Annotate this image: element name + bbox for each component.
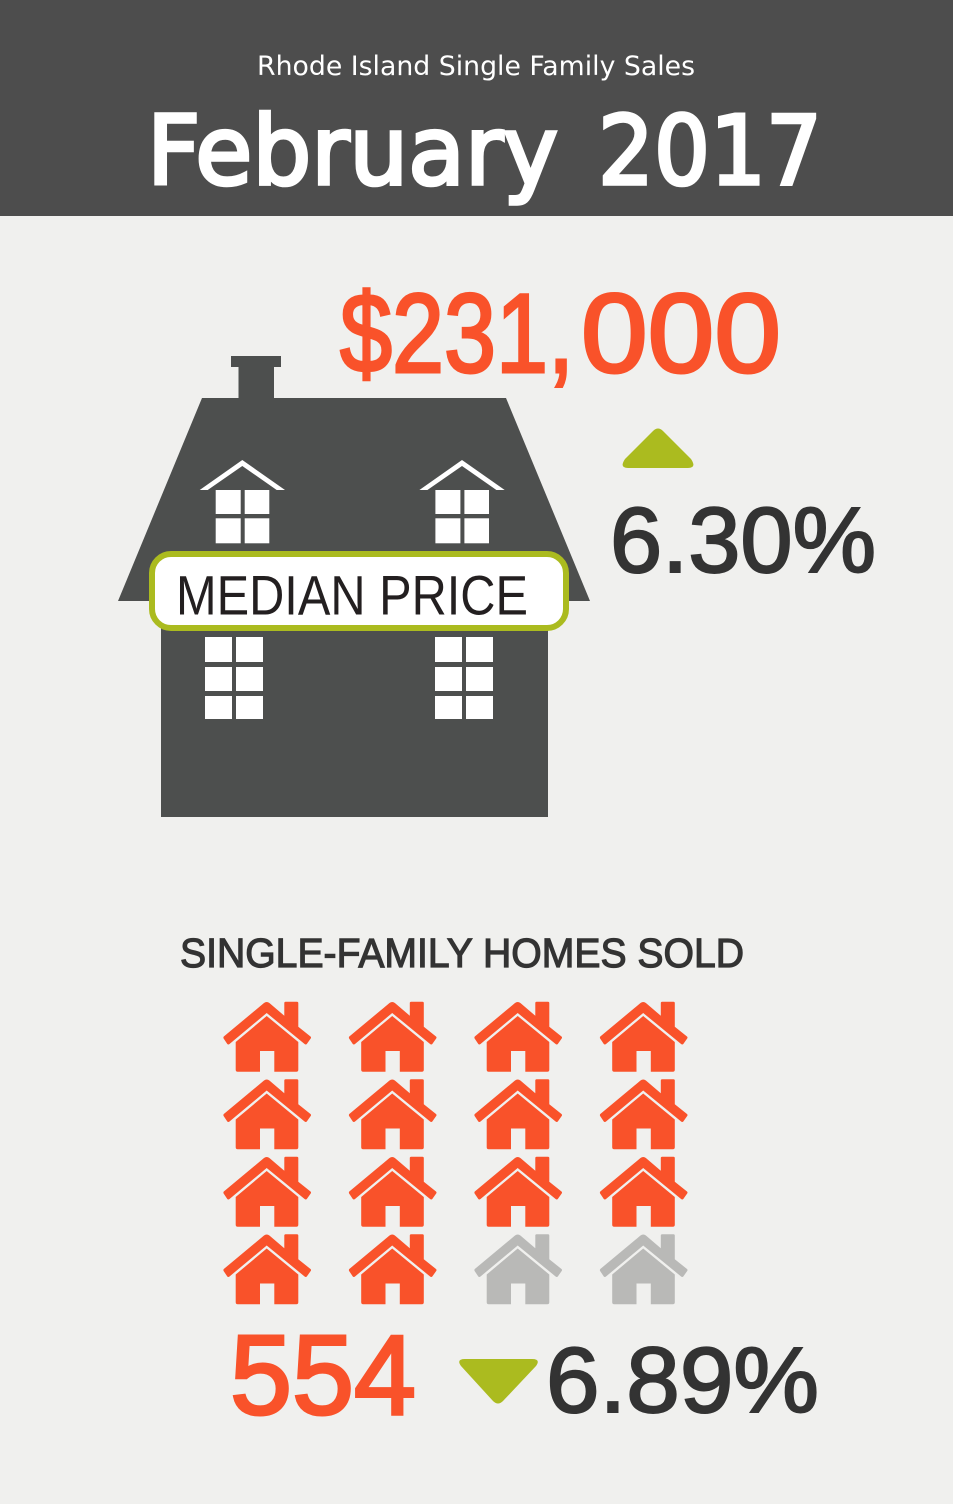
header title: 2017 (598, 97, 822, 207)
row 2 icons (223, 1079, 688, 1149)
homes sold heading: SINGLE-FAMILY HOMES SOLD (180, 930, 744, 976)
dormer right (419, 460, 505, 543)
row 3 icons (223, 1157, 688, 1227)
chimney (231, 356, 281, 400)
header title: February (147, 97, 558, 207)
median price label: MEDIAN PRICE (176, 564, 528, 626)
homes sold change: 6.89% (546, 1328, 819, 1432)
median price value: $231, (340, 271, 574, 396)
median price change: 6.30% (610, 488, 876, 592)
icon: green up triangle (623, 428, 693, 468)
row 4 icons (223, 1234, 688, 1304)
row 1 icons (223, 1002, 688, 1072)
median price value: 000 (581, 271, 781, 396)
lower window left (205, 637, 263, 719)
lower window right (435, 637, 493, 719)
median price value (340, 271, 781, 396)
header band (0, 0, 953, 216)
illustration: large house (118, 356, 590, 817)
pictogram: homes sold grid (223, 1002, 688, 1304)
house body (161, 600, 548, 817)
roof (118, 398, 590, 601)
header title (147, 97, 822, 207)
dormer left (200, 460, 285, 543)
header subtitle: Rhode Island Single Family Sales (257, 51, 695, 82)
homes sold value: 554 (230, 1312, 416, 1438)
icon: green down triangle (459, 1359, 538, 1404)
